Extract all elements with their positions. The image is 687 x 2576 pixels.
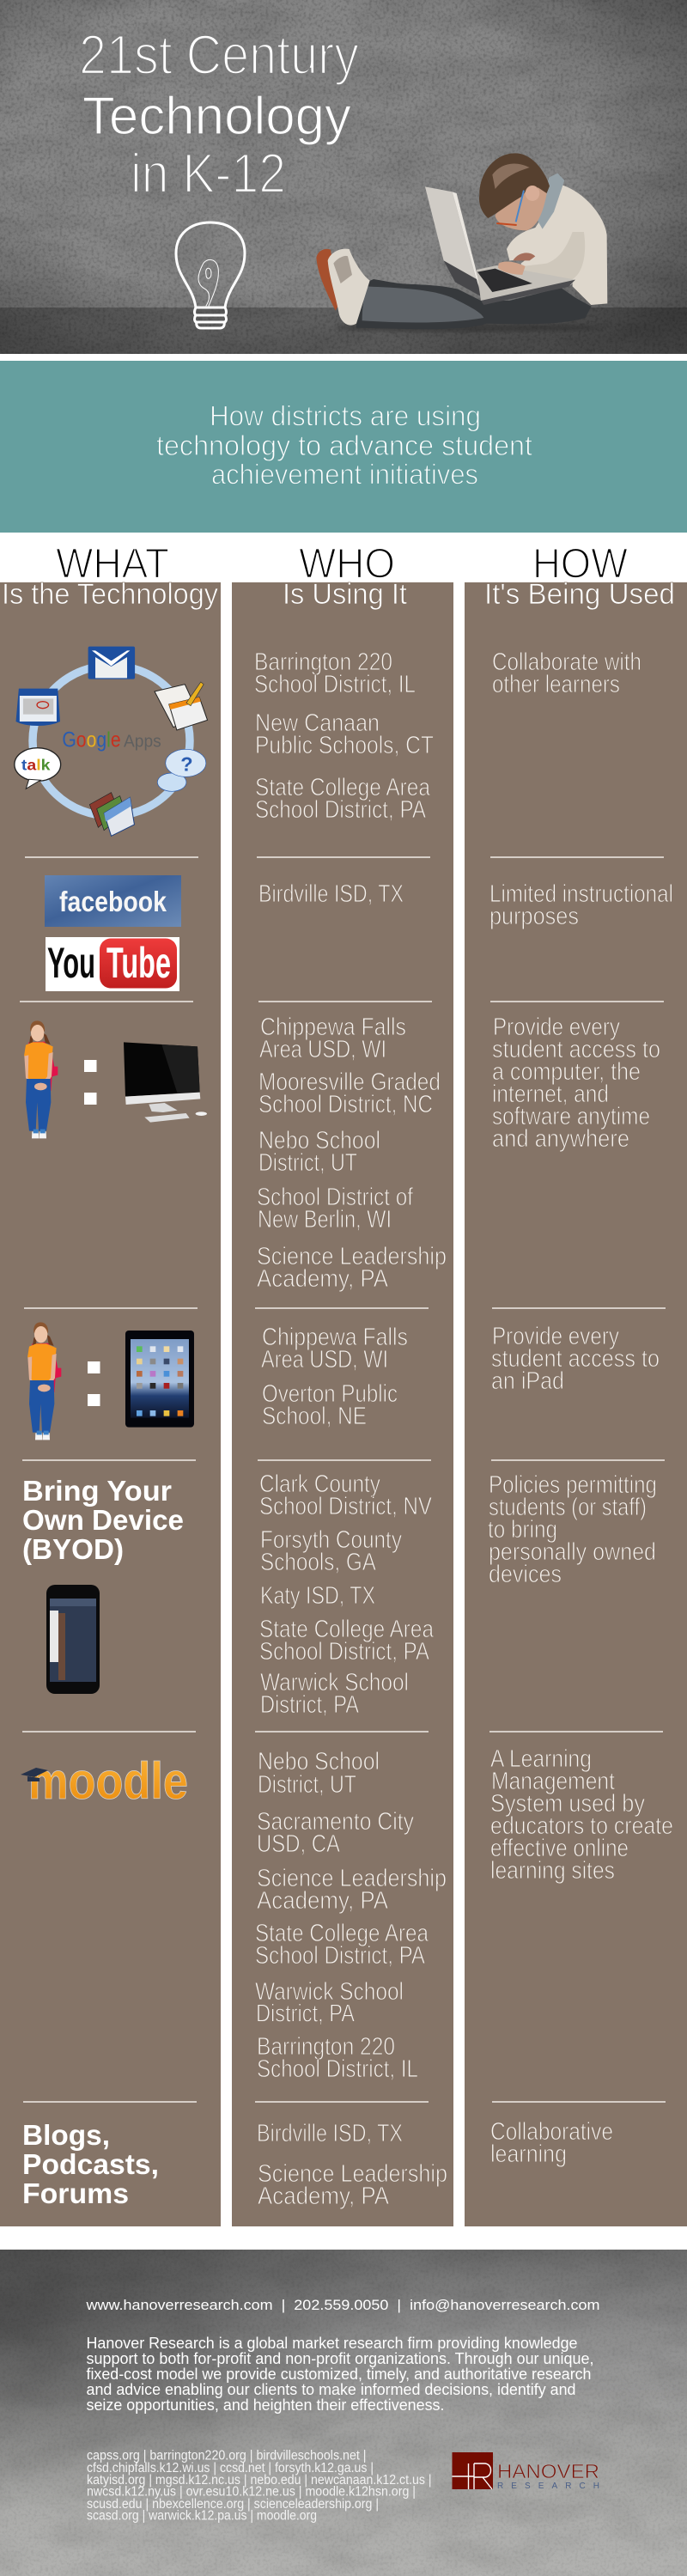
text: google apps districts: Public Schools, CT bbox=[255, 732, 434, 759]
text: one to one ipad districts: Overton Public bbox=[262, 1380, 398, 1408]
text: moodle districts: State College Area bbox=[255, 1920, 429, 1947]
text: blogs districts: Science Leadership bbox=[258, 2160, 447, 2188]
icon: google apps ring: talk bbox=[21, 757, 51, 774]
text: google apps use bbox=[492, 649, 641, 698]
text: moodle use: effective online bbox=[490, 1835, 629, 1862]
footer about text bbox=[86, 2334, 594, 2414]
text: byod use: devices bbox=[489, 1561, 562, 1588]
text: one to one ipad use: an iPad bbox=[491, 1367, 564, 1395]
heading: what: Is the Technology bbox=[2, 578, 218, 611]
icon: one to one colon bbox=[88, 1361, 100, 1406]
footer about text: seize opportunities, and heighten their effectiveness. bbox=[86, 2396, 445, 2414]
heading: what bbox=[2, 541, 218, 611]
text: moodle districts: District, UT bbox=[258, 1771, 356, 1799]
footer sources: capss.org | barrington220.org | birdvilleschools.net | bbox=[87, 2448, 366, 2463]
text: blogs districts: Birdville ISD, TX bbox=[257, 2120, 403, 2147]
text: google apps districts: State College Area bbox=[255, 774, 430, 801]
text: moodle districts: School District, PA bbox=[255, 1942, 425, 1970]
text: one to one ipad districts: School, NE bbox=[262, 1403, 367, 1430]
label: bring your own device: Own Device bbox=[22, 1504, 184, 1536]
text: one to one computer use: student access to bbox=[492, 1036, 660, 1063]
banner: subtitle: technology to advance student bbox=[156, 429, 532, 461]
label: blogs podcasts forums: Blogs, bbox=[22, 2119, 110, 2151]
text: one to one computer use: Provide every bbox=[493, 1014, 621, 1041]
icon: smartphone bbox=[46, 1585, 100, 1694]
text: byod use bbox=[488, 1471, 657, 1588]
label: blogs podcasts forums bbox=[22, 2119, 159, 2209]
text: moodle use: A Learning bbox=[490, 1745, 592, 1773]
footer sources: scasd.org | warwick.k12.pa.us | moodle.org bbox=[87, 2508, 317, 2524]
label: bring your own device bbox=[22, 1475, 184, 1565]
icon: desktop computer bbox=[124, 1042, 207, 1123]
text: byod districts: Warwick School bbox=[260, 1669, 409, 1696]
text: one to one computer use: and anywhere bbox=[492, 1125, 629, 1153]
text: one to one computer use: internet, and bbox=[492, 1081, 609, 1108]
text: one to one computer districts: District, UT bbox=[258, 1149, 357, 1177]
text: moodle districts bbox=[255, 1748, 447, 2083]
footer about text: and advice enabling our clients to make informed decisions, identify and bbox=[86, 2380, 575, 2398]
text: byod use: to bring bbox=[488, 1516, 557, 1544]
label: blogs podcasts forums: Forums bbox=[22, 2177, 129, 2209]
text: social media use: purposes bbox=[489, 903, 579, 930]
icon: student bbox=[24, 1020, 58, 1138]
text: moodle use: Management bbox=[491, 1768, 615, 1795]
banner: subtitle: How districts are using bbox=[210, 400, 481, 431]
text: blogs use: Collaborative bbox=[490, 2118, 613, 2146]
logo: hanover research: RESEARCH bbox=[497, 2482, 599, 2491]
text: byod use: students (or staff) bbox=[489, 1494, 647, 1521]
icon: google apps ring: Google bbox=[62, 728, 121, 752]
icon: youtube logo bbox=[46, 937, 179, 991]
text: moodle districts: Sacramento City bbox=[257, 1808, 415, 1836]
footer about text: fixed-cost model we provide customized, timely, and authoritative research bbox=[86, 2365, 591, 2383]
text: moodle districts: School District, IL bbox=[257, 2055, 418, 2083]
text: one to one computer districts: Mooresville Graded bbox=[258, 1069, 441, 1096]
text: byod districts: State College Area bbox=[259, 1616, 434, 1643]
heading: what: WHAT bbox=[56, 541, 169, 588]
text: google apps districts: School District, PA bbox=[255, 796, 426, 824]
text: byod districts: Katy ISD, TX bbox=[260, 1582, 375, 1610]
title: 21st Century bbox=[79, 23, 359, 86]
icon: student bbox=[27, 1322, 61, 1440]
text: byod districts: Schools, GA bbox=[260, 1549, 376, 1576]
title: in K-12 bbox=[131, 142, 286, 204]
heading: how: It's Being Used bbox=[484, 578, 675, 611]
heading: how bbox=[484, 541, 675, 611]
text: one to one computer districts: School District of bbox=[257, 1184, 413, 1211]
text: byod use: Policies permitting bbox=[489, 1471, 657, 1499]
text: blogs use bbox=[490, 2118, 613, 2168]
text: google apps districts: New Canaan bbox=[255, 709, 380, 737]
label: bring your own device: Bring Your bbox=[22, 1475, 172, 1507]
text: social media use bbox=[489, 880, 673, 930]
text: one to one computer use bbox=[492, 1014, 660, 1153]
text: moodle districts: Nebo School bbox=[258, 1748, 380, 1775]
text: moodle districts: Science Leadership bbox=[257, 1865, 447, 1892]
text: byod districts bbox=[259, 1471, 434, 1719]
text: one to one ipad use: student access to bbox=[491, 1345, 660, 1373]
text: moodle districts: District, PA bbox=[256, 2000, 355, 2027]
label: bring your own device: (BYOD) bbox=[22, 1533, 124, 1565]
text: social media districts: Birdville ISD, TX bbox=[258, 880, 404, 908]
text: google apps districts: Barrington 220 bbox=[254, 649, 392, 676]
text: moodle use bbox=[490, 1745, 673, 1885]
illustration: boy with laptop bbox=[316, 153, 607, 332]
logo: hanover research: HANOVER bbox=[497, 2460, 599, 2482]
text: moodle districts: Academy, PA bbox=[257, 1887, 388, 1915]
text: one to one computer use: a computer, the bbox=[492, 1058, 641, 1086]
text: one to one ipad districts: Area USD, WI bbox=[261, 1346, 388, 1373]
text: moodle districts: Barrington 220 bbox=[257, 2033, 395, 2061]
icon: youtube logo: You bbox=[47, 939, 95, 987]
text: one to one ipad districts: Chippewa Falls bbox=[262, 1324, 408, 1351]
text: byod districts: School District, PA bbox=[259, 1638, 429, 1666]
text: one to one computer use: software anytime bbox=[492, 1103, 650, 1130]
text: one to one computer districts bbox=[257, 1014, 447, 1293]
icon: moodle logo: moodle bbox=[28, 1752, 188, 1810]
icon: google apps ring bbox=[15, 647, 208, 836]
heading: who: WHO bbox=[299, 541, 395, 588]
title bbox=[79, 23, 359, 204]
icon: youtube logo: Tube bbox=[106, 939, 171, 987]
panel: how column bbox=[465, 541, 687, 2226]
text: google apps use: other learners bbox=[492, 671, 620, 698]
title: Technology bbox=[82, 87, 351, 146]
text: moodle use: System used by bbox=[490, 1790, 646, 1818]
heading: how: HOW bbox=[532, 541, 629, 588]
text: byod districts: Clark County bbox=[259, 1471, 381, 1498]
footer about text: Hanover Research is a global market research firm providing knowledge bbox=[86, 2334, 577, 2352]
icon: google apps ring: Apps bbox=[124, 731, 161, 751]
text: one to one computer districts: Nebo School bbox=[258, 1127, 380, 1154]
logo: hanover research bbox=[452, 2452, 599, 2491]
banner: subtitle: achievement initiatives bbox=[211, 459, 478, 490]
footer sources: katyisd.org | mgsd.k12.nc.us | nebo.edu | newcanaan.k12.ct.us | bbox=[87, 2473, 431, 2488]
text: byod districts: School District, NV bbox=[259, 1493, 432, 1520]
text: one to one computer districts: School District, NC bbox=[258, 1091, 433, 1118]
text: moodle districts: USD, CA bbox=[257, 1830, 340, 1858]
text: google apps districts: School District, IL bbox=[254, 671, 416, 698]
icon: google apps ring: ? bbox=[180, 752, 193, 775]
text: one to one computer districts: Chippewa Falls bbox=[260, 1014, 406, 1041]
text: blogs districts bbox=[257, 2120, 447, 2210]
footer sources bbox=[87, 2448, 431, 2524]
text: one to one ipad use: Provide every bbox=[492, 1323, 620, 1350]
text: google apps districts bbox=[254, 649, 434, 824]
footer sources: nwcsd.k12.ny.us | ovr.esu10.k12.ne.us | moodle.k12hsn.org | bbox=[87, 2484, 416, 2500]
panel: who column bbox=[232, 541, 453, 2226]
background: header photo wall bbox=[0, 0, 687, 354]
panel: what column bbox=[0, 541, 221, 2226]
text: byod districts: Forsyth County bbox=[260, 1526, 403, 1554]
heading: who: Is Using It bbox=[283, 578, 408, 611]
text: one to one ipad districts bbox=[261, 1324, 408, 1430]
label: blogs podcasts forums: Podcasts, bbox=[22, 2148, 159, 2180]
text: one to one computer districts: Area USD, WI bbox=[259, 1036, 386, 1063]
icon: facebook logo bbox=[45, 875, 181, 927]
text: one to one ipad use bbox=[491, 1323, 660, 1395]
footer background bbox=[0, 2250, 687, 2576]
icon: ipad bbox=[125, 1331, 194, 1428]
text: moodle use: learning sites bbox=[490, 1857, 615, 1885]
footer sources: scusd.edu | nbexcellence.org | scienceleadership.org | bbox=[87, 2497, 379, 2512]
icon: one to one colon bbox=[84, 1060, 96, 1105]
text: byod districts: District, PA bbox=[260, 1691, 359, 1719]
text: one to one computer districts: Academy, PA bbox=[257, 1265, 388, 1293]
banner: subtitle bbox=[0, 361, 687, 533]
text: one to one computer districts: New Berlin, WI bbox=[258, 1206, 392, 1233]
text: google apps use: Collaborate with bbox=[492, 649, 641, 676]
text: byod use: personally owned bbox=[489, 1538, 656, 1566]
text: blogs districts: Academy, PA bbox=[258, 2183, 389, 2210]
icon: light bulb bbox=[176, 222, 245, 328]
text: moodle districts: Warwick School bbox=[255, 1978, 404, 2006]
text: one to one computer districts: Science Leadership bbox=[257, 1243, 447, 1270]
heading: who bbox=[283, 541, 408, 611]
footer about text: support to both for-profit and non-profit organizations. Through our unique, bbox=[86, 2349, 594, 2367]
icon: facebook logo: facebook bbox=[59, 886, 167, 917]
text: blogs use: learning bbox=[490, 2141, 567, 2168]
footer sources: cfsd.chipfalls.k12.wi.us | ccsd.net | forsyth.k12.ga.us | bbox=[87, 2461, 374, 2476]
footer contact line: www.hanoverresearch.com | 202.559.0050 | info@hanoverresearch.com bbox=[85, 2297, 600, 2313]
